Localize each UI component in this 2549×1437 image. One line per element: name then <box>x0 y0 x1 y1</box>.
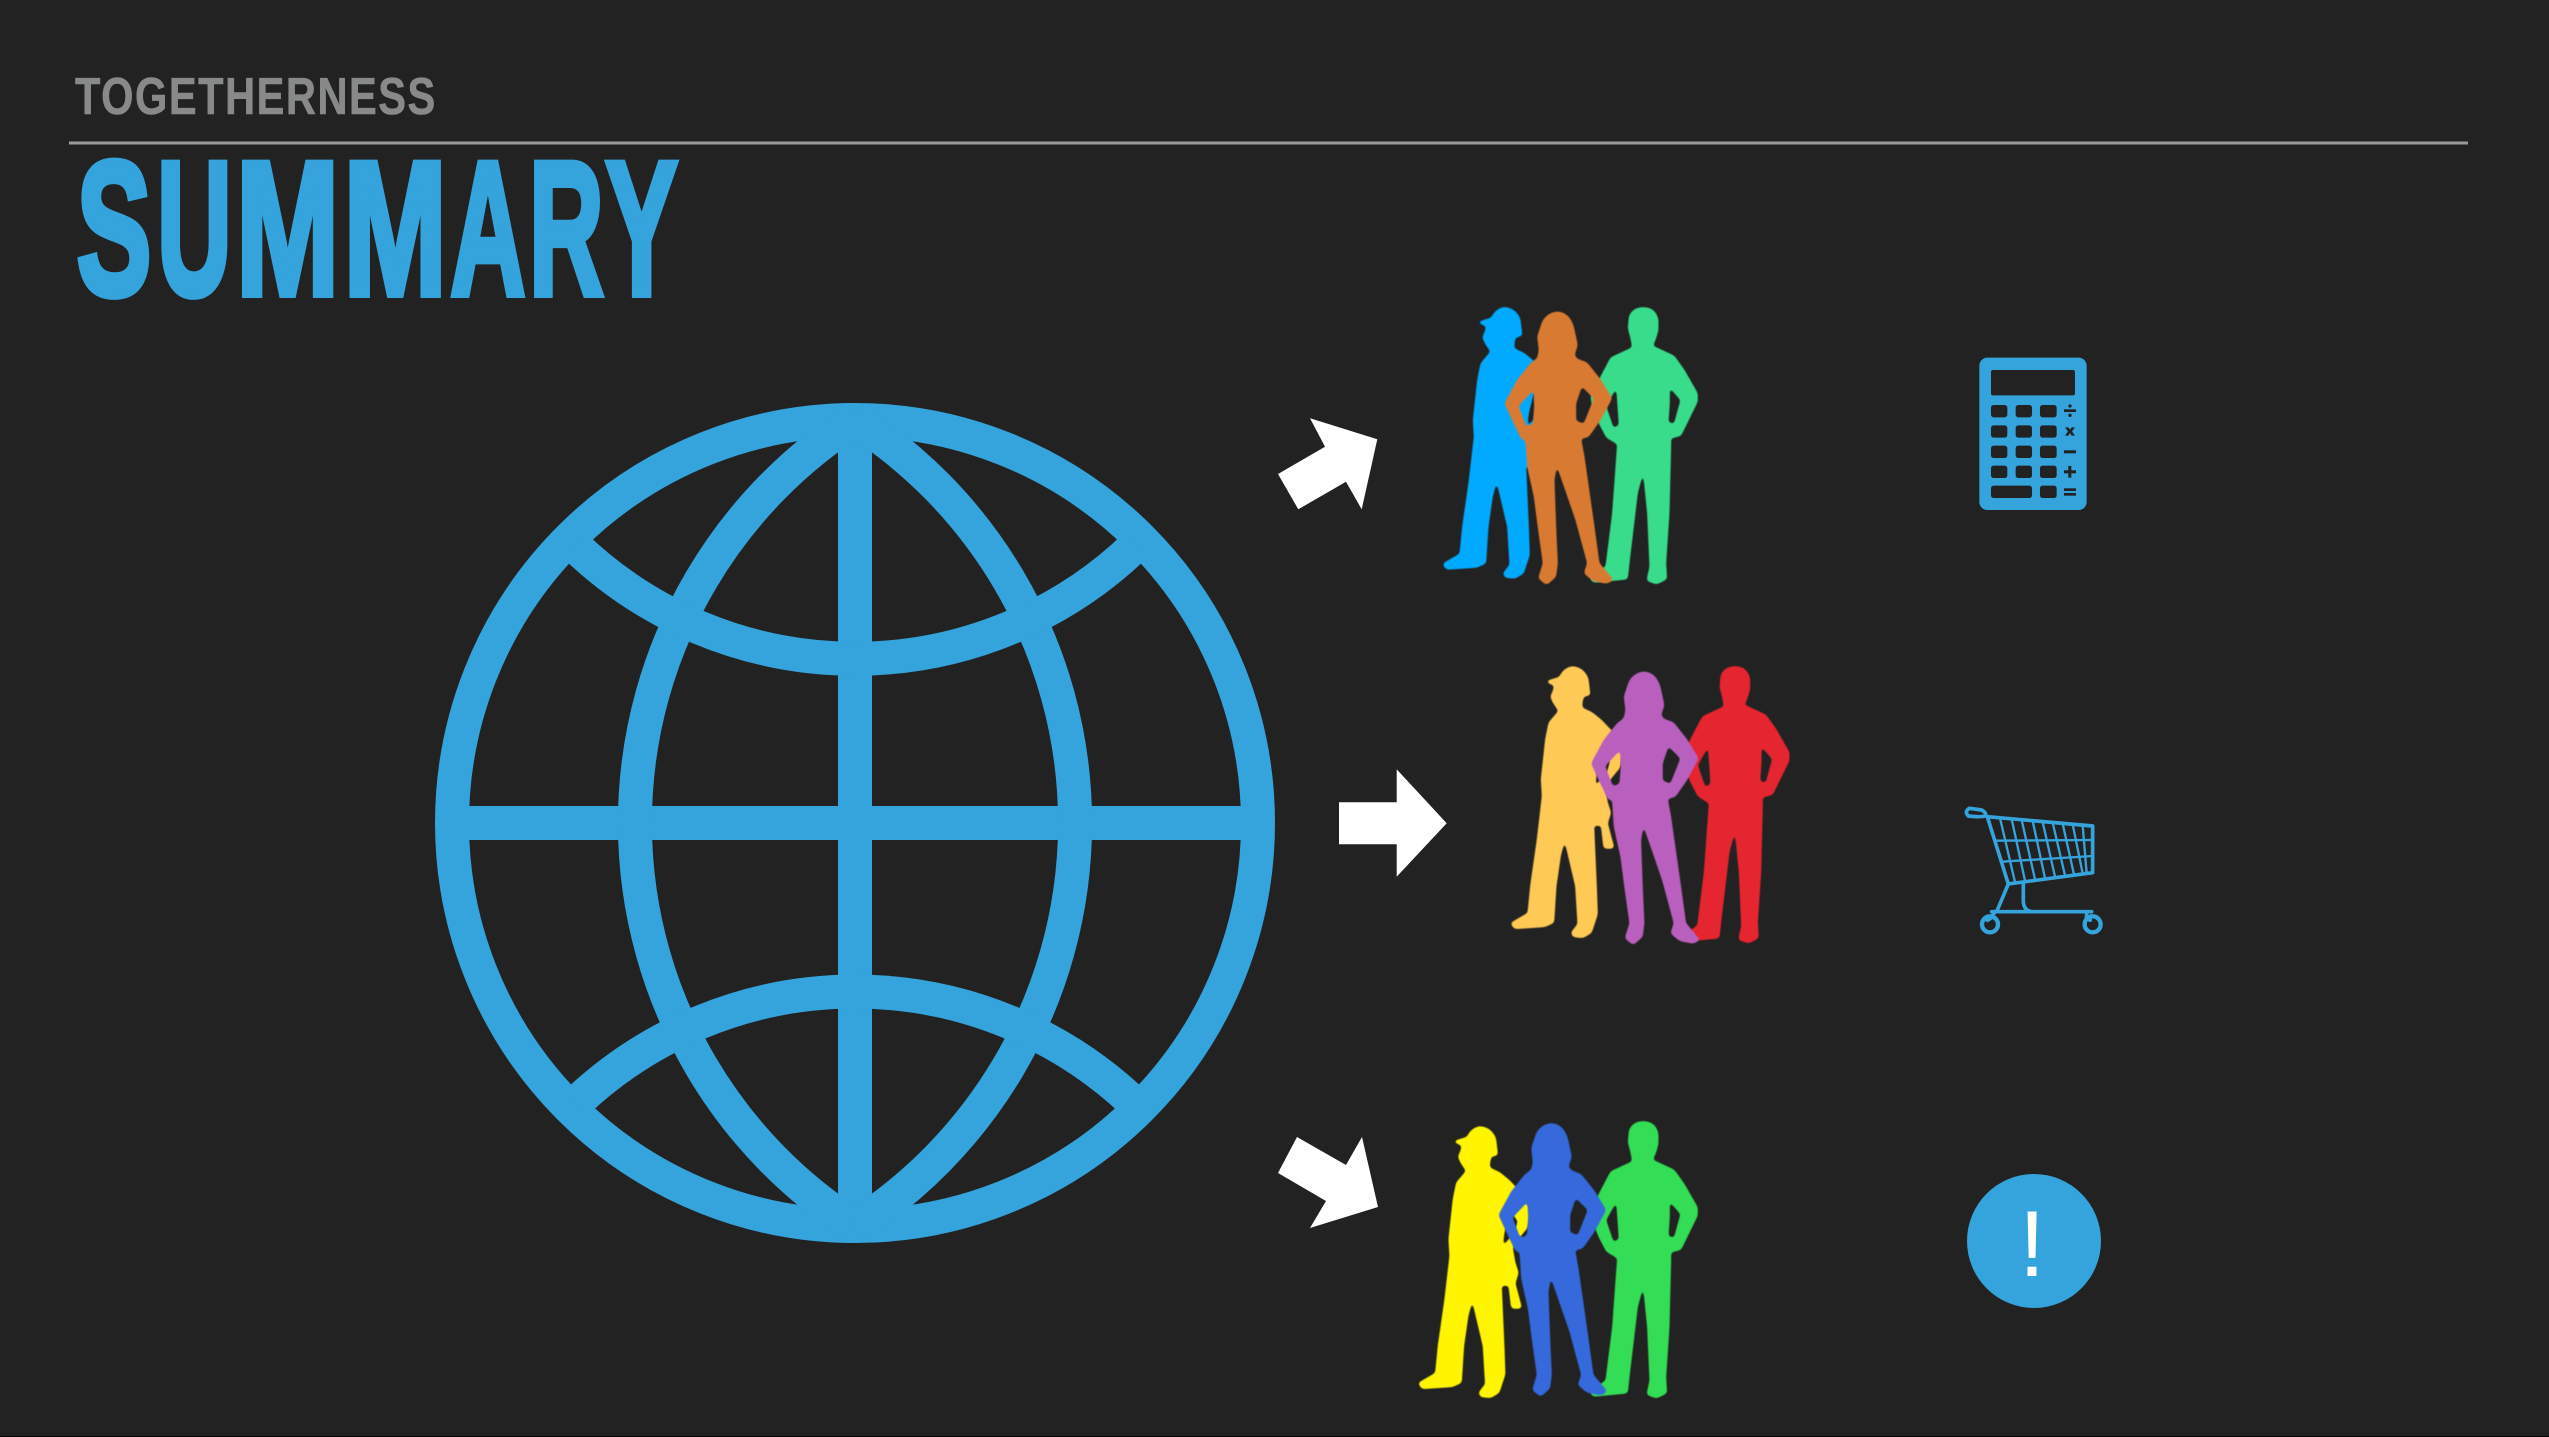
icon: alert circle <box>1967 1174 2101 1308</box>
title: U <box>157 122 232 336</box>
arrow: right <box>1339 769 1447 877</box>
title <box>77 121 678 336</box>
title: R <box>529 122 604 336</box>
figure: orange woman <box>1505 312 1613 585</box>
icon: globe <box>452 420 1258 1226</box>
arrow: down right <box>1278 1137 1378 1228</box>
title: M <box>236 123 339 336</box>
figure: blue worker <box>1443 307 1554 578</box>
people group: middle <box>1511 667 1789 945</box>
section label: TOGETHERNESS <box>75 67 437 125</box>
header rule <box>69 142 2468 144</box>
figure: purple woman <box>1592 672 1700 945</box>
title: Y <box>606 121 678 335</box>
people group: bottom <box>1418 1122 1697 1398</box>
figure: green man <box>1590 1122 1697 1398</box>
figure: amber worker <box>1511 667 1622 938</box>
icon: calculator <box>1979 358 2087 510</box>
title: M <box>344 123 447 336</box>
arrow: up right <box>1278 418 1377 509</box>
figure: green man <box>1590 308 1697 584</box>
figure: yellow worker <box>1418 1127 1530 1398</box>
figure: blue woman <box>1499 1124 1607 1396</box>
title: A <box>450 122 525 335</box>
icon: shopping cart <box>1966 808 2101 932</box>
icon: alert circle: ! <box>2019 1191 2045 1296</box>
people group: top <box>1443 307 1697 585</box>
figure: red man <box>1682 667 1789 943</box>
title: S <box>77 123 152 336</box>
